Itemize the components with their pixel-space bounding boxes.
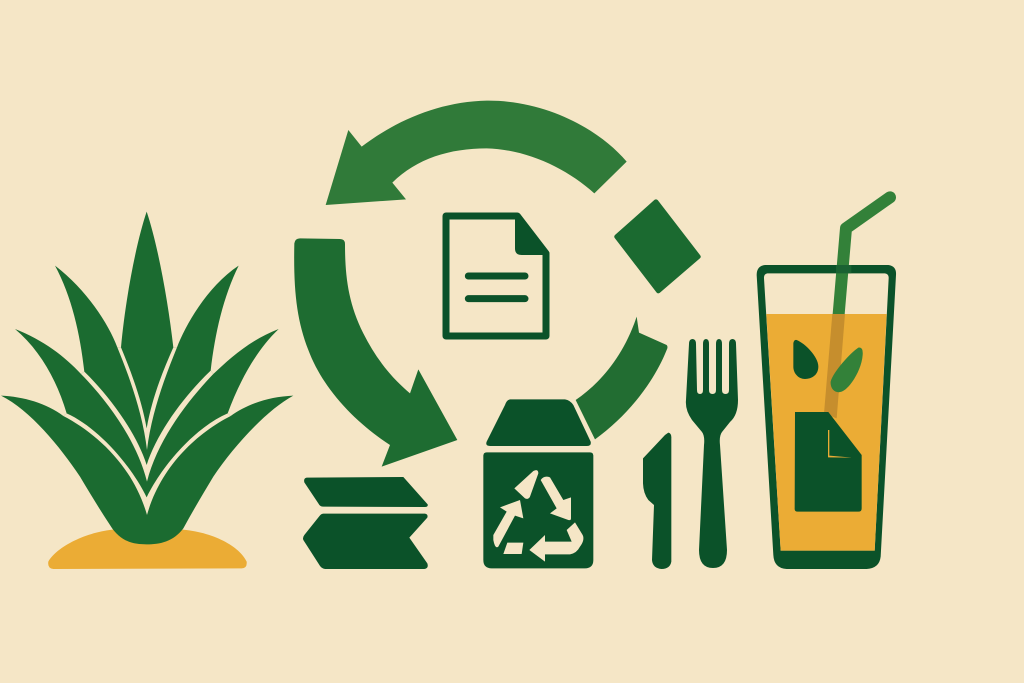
straw below juice bbox=[824, 314, 845, 418]
glass outline bbox=[757, 265, 896, 569]
arrow: left arc bbox=[294, 238, 457, 467]
icon: dark drop bbox=[793, 340, 818, 379]
icon: recycling bin bbox=[483, 399, 593, 568]
rim over straw bbox=[836, 265, 851, 273]
icon: stacked chevrons bbox=[303, 477, 428, 569]
recycling symbol bbox=[493, 470, 583, 562]
bin lid bbox=[486, 399, 591, 446]
straw bbox=[839, 197, 890, 314]
soil mound bbox=[48, 529, 247, 569]
icon: agave plant on mound bbox=[1, 212, 293, 569]
diamond segment bbox=[617, 202, 698, 291]
icon: fork bbox=[686, 339, 738, 568]
icon: document bbox=[446, 214, 548, 336]
icon: document in juice bbox=[795, 412, 862, 512]
leaf separators bbox=[63, 347, 231, 515]
juice bbox=[766, 314, 887, 551]
icon: knife bbox=[643, 433, 671, 569]
plant leaves bbox=[1, 212, 293, 544]
icon: green leaf bbox=[831, 348, 863, 392]
arrow: top arc bbox=[326, 101, 627, 205]
cycle arrows bbox=[294, 101, 698, 467]
arrow: right arc segment bbox=[576, 317, 667, 439]
bin body bbox=[483, 452, 593, 568]
icon: juice glass bbox=[757, 197, 896, 569]
